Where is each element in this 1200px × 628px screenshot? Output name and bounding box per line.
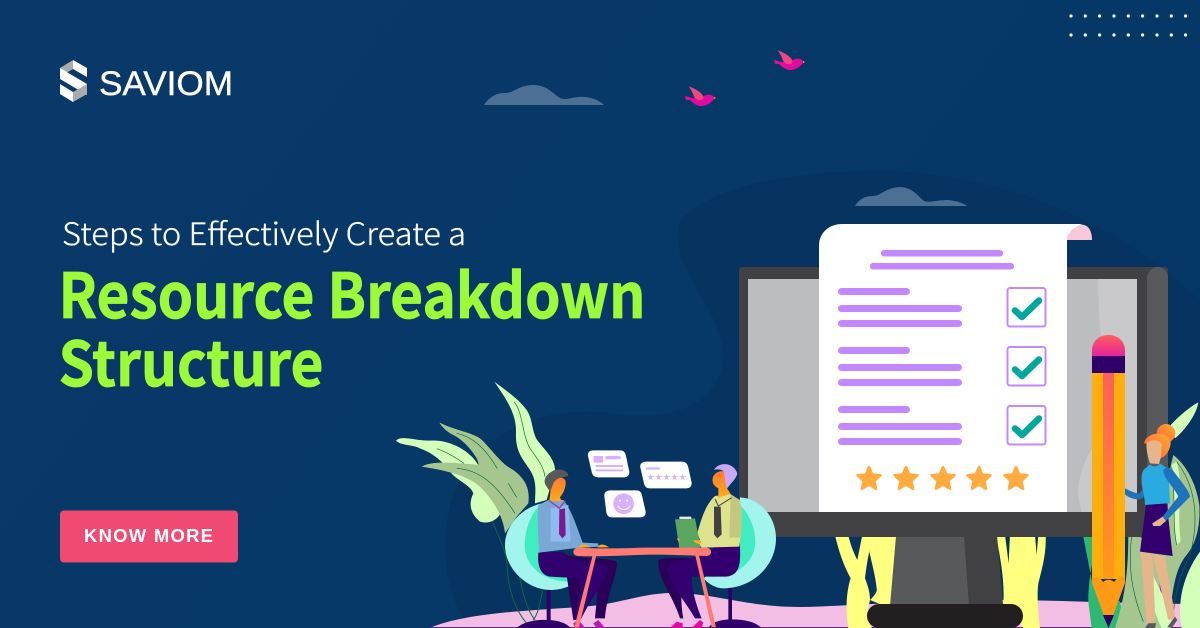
head: [549, 477, 566, 502]
meeting scene: [505, 450, 776, 628]
shoes: [670, 620, 703, 628]
trousers: [538, 552, 607, 619]
logo wordmark: SAVIOM: [99, 65, 233, 103]
shoes: [573, 619, 605, 628]
monitor side pillar: [1147, 267, 1168, 510]
sleeve: [729, 494, 742, 538]
title: Structure: [58, 314, 324, 404]
clip: [679, 517, 691, 519]
torso: [538, 499, 598, 553]
light leaves: [1150, 402, 1200, 628]
ground edge: [430, 627, 1200, 628]
checklist row 3: [838, 406, 1046, 445]
eraser: [1092, 335, 1125, 356]
collar: [715, 498, 732, 506]
hands: [579, 544, 609, 547]
torso: [697, 494, 742, 548]
hair: [714, 464, 737, 489]
man left: [505, 470, 617, 628]
background blob: [445, 171, 1200, 628]
heading lines: [870, 250, 1014, 270]
speech bubbles: [588, 450, 692, 517]
back arm: [1125, 488, 1144, 499]
pencil: [1092, 335, 1125, 628]
collar: [549, 501, 565, 508]
ferrule: [1092, 356, 1125, 373]
hair bun: [1157, 424, 1175, 443]
tall leaf: [494, 382, 555, 503]
cloud left: [484, 85, 604, 105]
legs: [1141, 552, 1155, 624]
title: Resource Breakdown: [58, 246, 646, 336]
monitor screen: [748, 279, 1137, 512]
bird upper: [774, 50, 805, 70]
clipboard: [675, 518, 701, 548]
centre stripe: [1103, 373, 1114, 579]
trousers: [667, 547, 740, 618]
tie: [714, 507, 722, 538]
speech bubble: stars: ★★★★★: [647, 473, 687, 483]
man right: [658, 464, 776, 628]
decorative dot grid: [1069, 14, 1187, 37]
screen highlight: [1078, 279, 1137, 512]
paper: [819, 224, 1084, 512]
left plant: [396, 382, 555, 623]
rating stars: [858, 467, 1028, 489]
hands: [677, 538, 702, 544]
leaf veins: [437, 402, 545, 513]
title: [58, 246, 646, 404]
skirt: [1140, 503, 1173, 556]
green leaves: [1083, 537, 1125, 628]
button: know more: [60, 510, 238, 562]
cloud right: [855, 187, 967, 206]
ground: [430, 593, 1200, 628]
monitor base: [867, 604, 1023, 628]
sage leaf: [422, 422, 529, 533]
right plant: [1083, 402, 1200, 628]
torso: [1141, 463, 1170, 505]
woman presenter: [1125, 424, 1190, 628]
pencil point: [1103, 615, 1114, 628]
chair right: [703, 497, 776, 628]
head: [712, 471, 731, 498]
button: know more: KNOW MORE: [84, 525, 213, 546]
page curl: [1060, 225, 1092, 240]
veins: [1130, 462, 1195, 622]
speech bubble: card: [588, 450, 629, 477]
shoes: [1167, 617, 1177, 628]
checklist row 1: [838, 288, 1046, 327]
pencil tip: [1092, 576, 1125, 628]
subheading: Steps to Effectively Create a: [62, 209, 466, 254]
document sheet: [819, 224, 1092, 512]
checklist row 2: [838, 347, 1046, 386]
hair: [545, 470, 568, 492]
far-left leaf: [396, 438, 502, 523]
far leg: [563, 553, 617, 620]
shirt front: [551, 505, 571, 542]
monitor stand: [890, 536, 1003, 606]
chair left: [505, 503, 578, 628]
front arm: [1162, 468, 1190, 521]
logo: [60, 60, 233, 103]
hair: [1144, 434, 1171, 458]
monitor: [739, 267, 1168, 628]
bird lower: [685, 86, 716, 106]
sage leaves: [1115, 455, 1200, 628]
hand: [1152, 517, 1166, 526]
purple accent: [1159, 558, 1166, 598]
table: [573, 548, 716, 627]
plant stems: [486, 497, 543, 623]
tie: [559, 508, 566, 538]
logo mark: [60, 60, 87, 102]
yellow plants behind monitor: [835, 535, 1046, 628]
pencil body: [1092, 373, 1125, 579]
far leg: [658, 555, 718, 618]
face: [1147, 440, 1162, 464]
monitor frame: [739, 267, 1168, 537]
speech bubble: smiley: [604, 490, 646, 517]
